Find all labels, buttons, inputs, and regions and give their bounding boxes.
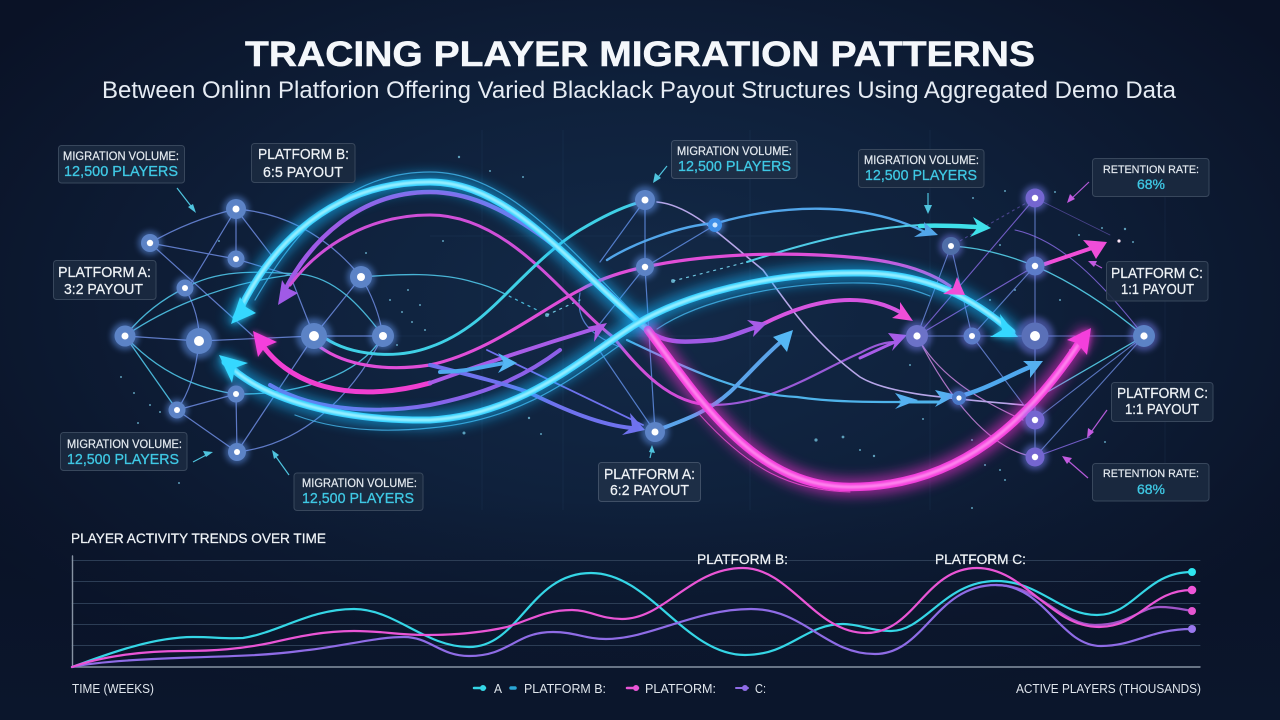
nodes: center cluster (631, 186, 725, 446)
callout: migration volume bottom left: 12,500 PLAYERS (67, 451, 179, 468)
callout: platform C lower (1112, 382, 1213, 422)
callout: retention rate bottom (1092, 464, 1209, 501)
small pointer arrows: magenta (1062, 182, 1107, 478)
nodes: right cluster (902, 185, 1159, 470)
callout: retention rate top: 68% (1137, 176, 1165, 192)
flow: glowing cyan lower tube (225, 273, 1012, 420)
callout: migration volume top left: MIGRATION VOLUME: (63, 151, 179, 163)
legend: PLATFORM: (645, 682, 716, 696)
flow: glowing magenta tube (648, 330, 1084, 487)
callout: retention rate top (1092, 158, 1209, 196)
network cluster: left (125, 209, 547, 452)
callout: migration volume top center (672, 140, 797, 178)
y axis label: ACTIVE PLAYERS (THOUSANDS) (1016, 682, 1201, 696)
legend: C: (755, 682, 766, 696)
callout: migration volume top left: 12,500 PLAYERS (64, 163, 178, 180)
callout: retention rate bottom: 68% (1137, 481, 1165, 497)
callout: platform C upper: PLATFORM C: (1111, 265, 1203, 282)
callout: migration volume bottom left (60, 432, 187, 470)
callout: platform A 6:2: 6:2 PAYOUT (610, 482, 689, 499)
particles (120, 156, 1134, 509)
callout: platform C upper: 1:1 PAYOUT (1121, 281, 1194, 298)
network cluster: right (917, 198, 1144, 457)
chart heading: PLAYER ACTIVITY TRENDS OVER TIME (71, 531, 326, 546)
callout: platform C upper (1106, 262, 1208, 301)
arrowheads (219, 217, 1107, 435)
flow: magenta and purple curves (258, 192, 1092, 428)
line chart: player activity (72, 556, 1200, 667)
series: muted purple-magenta (996, 585, 1192, 625)
chart annotation: platform B: PLATFORM B: (697, 552, 788, 567)
callout: platform A 3:2: PLATFORM A: (58, 264, 151, 281)
legend: PLATFORM B: (524, 682, 606, 696)
callout: migration volume top center: MIGRATION VOLUME: (677, 146, 792, 158)
callout: platform A 3:2 (54, 260, 156, 300)
network cluster: center (547, 200, 747, 432)
callout: migration volume top center: 12,500 PLAYERS (678, 158, 791, 175)
callout: migration volume bottom center (294, 473, 423, 510)
flow: glowing cyan upper tube (236, 182, 648, 330)
callout: migration volume right: 12,500 PLAYERS (865, 167, 977, 184)
legend (474, 682, 766, 696)
callout: platform C lower: 1:1 PAYOUT (1125, 401, 1199, 418)
series: magenta (72, 568, 1192, 667)
legend: A (494, 682, 503, 696)
callout: platform C lower: PLATFORM C: (1117, 385, 1208, 402)
series: cyan (72, 572, 1192, 667)
callout: migration volume bottom center: MIGRATION VOLUME: (302, 478, 417, 490)
particle: white spark (1117, 239, 1121, 243)
x axis label: TIME (WEEKS) (72, 682, 154, 696)
callout: migration volume bottom left: MIGRATION VOLUME: (67, 439, 182, 451)
subtitle: Between Onlinn Platforion Offering Varied Blacklack Payout Structures Using Aggregated Demo Data (102, 77, 1177, 104)
callout: platform B 6:5: 6:5 PAYOUT (263, 164, 343, 181)
callout: platform A 6:2: PLATFORM A: (604, 466, 695, 483)
callout: migration volume top left (58, 146, 184, 183)
title: TRACING PLAYER MIGRATION PATTERNS (245, 35, 1035, 74)
callout: platform B 6:5 (252, 144, 355, 182)
callout: migration volume right: MIGRATION VOLUME: (864, 155, 979, 167)
callout: migration volume right (858, 150, 984, 188)
arrowhead glows (219, 297, 1091, 383)
callout: platform A 3:2: 3:2 PAYOUT (64, 281, 143, 298)
callout: migration volume bottom center: 12,500 PLAYERS (302, 490, 414, 507)
callout: platform B 6:5: PLATFORM B: (258, 146, 349, 163)
nodes: left cluster (111, 196, 397, 464)
series: purple (72, 585, 1192, 667)
callout: retention rate top: RETENTION RATE: (1103, 164, 1199, 176)
series end markers (1188, 568, 1196, 633)
small pointer arrows: cyan (177, 166, 932, 475)
chart annotation: platform C: PLATFORM C: (935, 552, 1026, 567)
callout: platform A 6:2 (598, 462, 700, 502)
flow: thin secondary curves (255, 172, 1023, 492)
callout: retention rate bottom: RETENTION RATE: (1103, 468, 1199, 480)
